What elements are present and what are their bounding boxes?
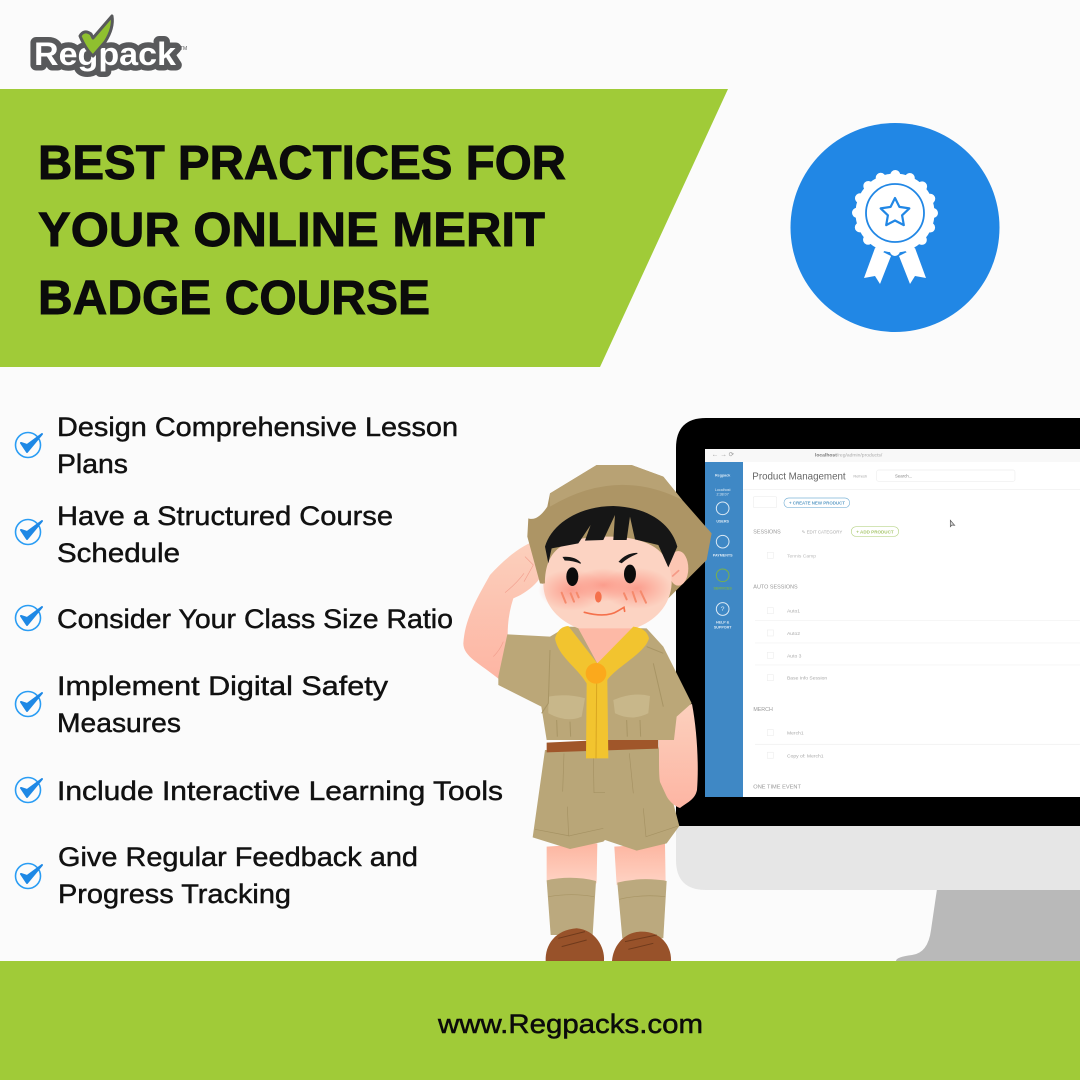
logo: Regpack: [34, 16, 187, 72]
item: feedback: Give Regular Feedback and: [58, 842, 418, 872]
screen UI: localhost/reg/admin/products/: [815, 453, 883, 459]
screen UI: HELP &: [716, 620, 730, 624]
boy: lower body: [533, 737, 679, 961]
screen UI: SESSIONS: [753, 530, 781, 536]
screen UI: SUPPORT: [714, 626, 732, 630]
item: digital safety: [16, 671, 389, 738]
screen UI: Base Info Session: [787, 676, 827, 682]
screen UI: PAYMENTS: [713, 553, 733, 557]
screen UI: ✎ EDIT CATEGORY: [802, 529, 842, 534]
item: course schedule: Have a Structured Course: [57, 501, 393, 531]
item: feedback: Progress Tracking: [58, 879, 291, 909]
checklist: [16, 412, 503, 909]
item: digital safety: Measures: [57, 708, 181, 738]
screen UI: Auto1: [787, 608, 800, 614]
boy: saluting arm: [463, 540, 546, 680]
screen UI: ← → ⟳: [712, 452, 735, 459]
illustration: saluting scout boy: [463, 465, 712, 961]
item: lesson plans: Plans: [57, 449, 128, 479]
screen UI: + CREATE NEW PRODUCT: [789, 500, 845, 505]
footer url: www.Regpacks.com: [437, 1009, 703, 1039]
screen UI: MERCH: [753, 707, 773, 713]
icon: award badge in blue circle: [790, 123, 1000, 332]
screen UI: Regpack: [715, 474, 731, 478]
boy: right arm: [658, 704, 698, 808]
screen UI: [712, 452, 1080, 791]
screen UI: Tennis Camp: [787, 553, 816, 559]
title text: BADGE COURSE: [38, 272, 430, 325]
title banner: [0, 89, 728, 367]
title text: BEST PRACTICES FOR: [38, 137, 566, 190]
screen UI: ?: [721, 606, 725, 613]
screen UI: Merch1: [787, 731, 804, 737]
item: feedback: [16, 842, 418, 909]
screen UI: 2:38:07: [717, 493, 729, 497]
screen UI: + ADD PRODUCT: [856, 529, 894, 534]
screen UI: Auto 3: [787, 653, 802, 659]
screen UI: Product Management: [752, 471, 846, 482]
boy: upper body: [498, 627, 692, 740]
screen UI: USERS: [716, 520, 730, 524]
screen UI: Search...: [895, 473, 912, 478]
item: interactive tools: Include Interactive Learning Tools: [57, 776, 503, 806]
item: course schedule: [16, 501, 393, 568]
title text: YOUR ONLINE MERIT: [38, 204, 545, 257]
title text: [38, 137, 566, 325]
item: lesson plans: [16, 412, 458, 479]
monitor with product management screen: [676, 418, 1080, 961]
item: class size: Consider Your Class Size Ratio: [57, 604, 453, 634]
item: digital safety: Implement Digital Safety: [57, 671, 389, 701]
item: lesson plans: Design Comprehensive Lesson: [57, 412, 458, 442]
logo: Regpack: TM: [180, 46, 187, 52]
screen UI: SERVICES: [713, 587, 732, 591]
screen UI: Copy of: Merch1: [787, 753, 824, 759]
boy: head with hat: [527, 465, 712, 633]
sidebar icons: [716, 502, 729, 615]
screen UI: Refresh: [853, 473, 867, 478]
item: course schedule: Schedule: [57, 538, 180, 568]
screen UI: AUTO SESSIONS: [753, 585, 798, 591]
screen UI: Auto2: [787, 631, 800, 637]
screen UI: Localhost: [715, 488, 730, 492]
screen UI: ONE TIME EVENT: [753, 785, 802, 791]
footer bar: [0, 961, 1080, 1080]
boy: neckerchief: [555, 626, 649, 758]
logo: Regpack: Regpack: [34, 36, 176, 72]
